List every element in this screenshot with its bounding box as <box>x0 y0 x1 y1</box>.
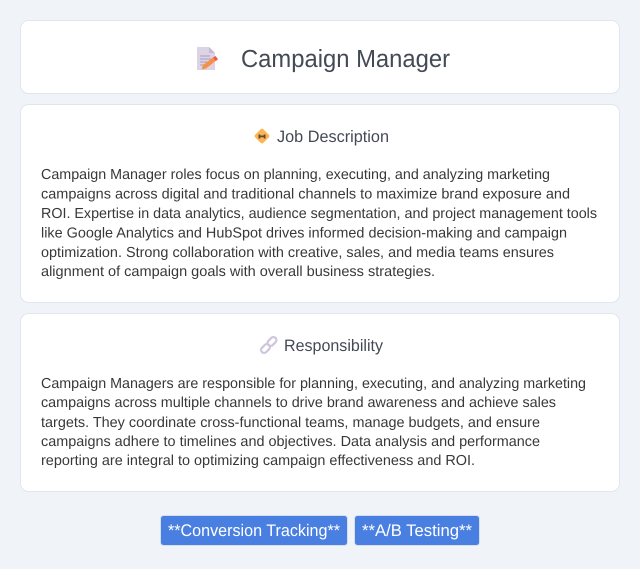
text block: responsibility <box>41 376 586 469</box>
text block: job description: campaigns across digital and traditional channels to maximize brand exposure and <box>41 186 570 202</box>
title: Campaign Manager <box>241 46 450 73</box>
text block: job description: Campaign Manager roles focus on planning, executing, and analyzing marketing <box>41 167 550 183</box>
text block: responsibility: campaigns adhere to timelines and objectives. Data analysis and performance <box>41 434 540 450</box>
heading: responsibility: Responsibility <box>284 336 384 355</box>
text block: job description: like Google Analytics and HubSpot drives informed decision-making and campaign <box>41 226 567 242</box>
icon: orange diamond sign <box>254 128 270 144</box>
text block: job description: alignment of campaign goals with overall business strategies. <box>41 264 435 280</box>
icon: document with pencil <box>197 47 218 70</box>
panel: title card <box>20 20 620 94</box>
text block: job description: ROI. Expertise in data analytics, audience segmentation, and project management tools <box>41 206 597 222</box>
tag: a/b testing <box>354 516 480 546</box>
tag: a/b testing: **A/B Testing** <box>362 521 472 540</box>
text block: responsibility: targets. They coordinate cross-functional teams, manage budgets, and ensure <box>41 415 540 431</box>
text block: job description: optimization. Strong collaboration with creative, sales, and media teams ensures <box>41 245 554 261</box>
text block: responsibility: reporting are integral to optimizing campaign effectiveness and ROI. <box>41 453 475 469</box>
panel: job description <box>20 104 620 302</box>
text block: responsibility: Campaign Managers are responsible for planning, executing, and analyzing marketing <box>41 376 586 392</box>
text block: responsibility: campaigns across multiple channels to drive brand awareness and achieve sales <box>41 395 556 411</box>
heading: job description: Job Description <box>277 127 389 146</box>
icon: chain link <box>260 336 278 354</box>
text block: job description <box>41 167 597 280</box>
tag: conversion tracking <box>160 516 348 546</box>
tag: conversion tracking: **Conversion Tracking** <box>168 521 340 540</box>
panel: responsibility <box>20 314 620 492</box>
